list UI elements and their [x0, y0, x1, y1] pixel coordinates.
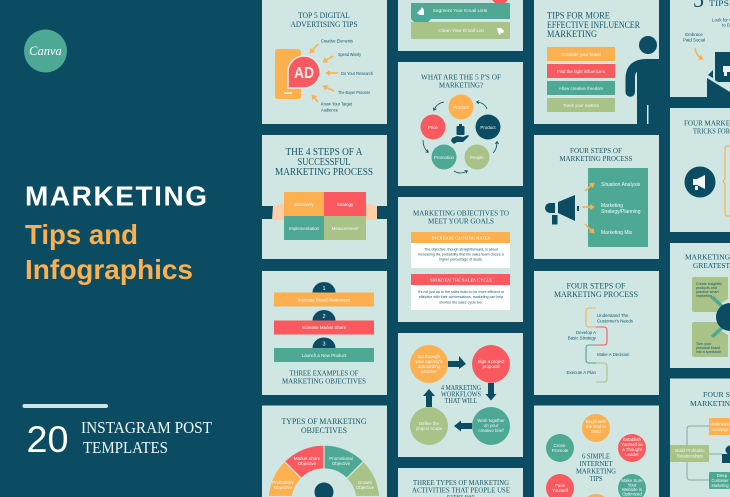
- heading: [690, 390, 730, 408]
- workflow circles: process: [421, 369, 437, 374]
- step 3: [274, 338, 374, 362]
- caption: Instagram post templates: TEMPLATES: [83, 438, 168, 457]
- card: sales cycle: It's not just up to the sales team to be more efficient or: [418, 290, 505, 294]
- panel: 4 marketing workflows: [398, 333, 523, 457]
- heading: FOUR S: [703, 390, 730, 399]
- heading: TIPS: [590, 474, 602, 483]
- orange brace: [723, 146, 730, 216]
- heading: ADVERTISING TIPS: [290, 19, 358, 29]
- heading: MARKETING PROCESS: [275, 167, 373, 178]
- heading: THAT WILL: [444, 397, 478, 405]
- subtitle: Tips and Infographics: Infographics: [25, 254, 193, 285]
- heading: [693, 0, 729, 12]
- tip circles: Yourself: [552, 488, 569, 493]
- ring labels: Market Share: [294, 456, 321, 461]
- green note cards: practice smart: [696, 290, 719, 294]
- step 3: 3: [322, 342, 326, 348]
- orange box: [709, 418, 730, 435]
- workflow circles: Define the: [419, 421, 440, 426]
- panel: types of marketing objectives: [262, 406, 387, 497]
- heading: EFFECTIVE INFLUENCER: [547, 20, 640, 30]
- tip labels: to D: [722, 22, 730, 28]
- heading: 4 MARKETING: [441, 384, 481, 392]
- ring labels: [272, 456, 375, 490]
- panel: four steps marketing partial: [670, 378, 730, 497]
- tip circles: Promote: [552, 448, 569, 453]
- heading: MARKETING PROCESS: [554, 290, 638, 299]
- bracket timeline: [586, 308, 607, 382]
- step 2: 2: [322, 314, 326, 320]
- tip circles: Pace: [555, 483, 566, 488]
- heading: [685, 252, 730, 270]
- heading: [290, 10, 358, 29]
- heading: WORKFLOWS: [441, 390, 481, 398]
- heading: MARKETING: [685, 252, 730, 262]
- tip circles: Establish: [623, 437, 641, 442]
- heading: THE 4 STEPS OF A: [286, 147, 363, 158]
- heading: [684, 118, 730, 136]
- icon: phone with AD pin: AD: [294, 65, 314, 82]
- workflow circles: onboarding: [418, 364, 441, 369]
- tips list: Audience: [321, 108, 339, 112]
- panel: marketing objectives to meet your goals: [398, 197, 523, 322]
- divider bar: [22, 404, 108, 408]
- workflow circles: your agency's: [416, 359, 443, 364]
- subtitle: Tips and Infographics: [25, 219, 193, 285]
- ring labels: Objective: [332, 461, 351, 466]
- arrow: [695, 48, 703, 59]
- panel: four steps with megaphone: [534, 135, 659, 259]
- tips list: The Buyer Process: [338, 90, 371, 95]
- heading: [421, 72, 501, 90]
- panel: three types of marketing activities: [398, 468, 523, 497]
- workflow circles: proposal: [483, 364, 499, 369]
- timeline labels: Basic Strategy: [568, 336, 597, 340]
- connector lines: [687, 426, 722, 480]
- tip circles: Optimized: [622, 492, 642, 496]
- tips list: [321, 38, 373, 112]
- teal ribbon: Segment Your Email Lists: [433, 8, 488, 14]
- teal list block: Marketing Mix: [601, 230, 633, 236]
- ring labels: Profitability: [272, 480, 295, 485]
- ring labels: Objective: [274, 485, 293, 490]
- card: sales cycle: [411, 274, 510, 310]
- step 1: 1: [322, 286, 326, 292]
- tips list: Creative Elements: [321, 38, 354, 44]
- tips bars: Consider your brand: [561, 52, 601, 57]
- timeline labels: Execute A Plan: [566, 370, 597, 375]
- tips bars: Allow creative freedom: [559, 86, 604, 91]
- green note cards: into a spectacle: [696, 350, 721, 354]
- card: sales cycle: effective with their conversations, marketing can help: [419, 295, 503, 299]
- tips bars: Track your metrics: [563, 103, 600, 108]
- step 1: [274, 282, 374, 306]
- heading: INTERNET: [580, 459, 613, 468]
- timeline labels: Understand The: [597, 313, 629, 318]
- tip circles: Begin with: [586, 419, 607, 424]
- workflow circles: Go through: [418, 354, 441, 359]
- ring hub: [314, 483, 334, 497]
- cycle circles: [420, 94, 500, 170]
- panel: three examples of marketing objectives: [262, 271, 387, 395]
- heading: [282, 368, 366, 386]
- heading: SUCCESSFUL: [298, 157, 350, 168]
- step 1: Increase Brand Awareness: [298, 298, 351, 302]
- hands holding board: [262, 202, 387, 220]
- heading: [441, 384, 481, 405]
- workflow circles: [410, 345, 510, 445]
- green centre box: [670, 445, 709, 462]
- step 2: [274, 310, 374, 334]
- four step grid: Strategy: [337, 202, 354, 207]
- workflow circles: creative brief: [478, 428, 504, 433]
- card: close rate: INCREASE CLOSING RATES: [432, 236, 491, 240]
- teal list block: Situation Analysis: [601, 182, 641, 188]
- card: close rate: higher percentage of deals.: [439, 258, 483, 262]
- green centre box: Build Profitable: [675, 448, 705, 453]
- icon: megaphone badge: [684, 166, 716, 198]
- tips bars: [547, 47, 615, 112]
- workflow arrows: [423, 356, 496, 432]
- left cover panel: [22, 30, 212, 460]
- caption: Instagram post templates: [81, 418, 212, 457]
- cycle arrows: [423, 102, 497, 173]
- icon: hand holding bag: [451, 124, 469, 144]
- timeline labels: Make A Decision: [597, 352, 630, 357]
- panel: 4 steps of a successful marketing process: [262, 135, 387, 259]
- panel: top 5 digital advertising tips: [262, 0, 387, 124]
- workflow circles: project scope: [416, 426, 443, 431]
- heading: TIPS FOR MORE: [547, 10, 610, 20]
- logo: Canva badge: [24, 30, 67, 72]
- tip labels: Embrace: [685, 32, 703, 37]
- icon: person: [722, 446, 730, 463]
- green note cards: marketing: [696, 294, 712, 298]
- green ribbon: Clean Your Email List: [438, 28, 484, 34]
- workflow circles: on your: [484, 423, 499, 428]
- heading: MARKETING OBJECTIVES: [282, 376, 366, 386]
- heading: TYPES OF MARKETING: [282, 417, 367, 426]
- arrows: [310, 44, 338, 102]
- four step grid: Implementation: [289, 226, 320, 231]
- logo: Canva badge: Canva: [29, 44, 62, 58]
- heading: THREE TYPES OF MARKETING: [413, 478, 510, 487]
- timeline labels: Develop A: [576, 330, 596, 335]
- heading: [576, 452, 617, 483]
- heading: FOUR STEPS OF: [566, 282, 626, 290]
- panel: influencer marketing tips: [534, 0, 670, 124]
- workflow circles: Sign a project: [478, 359, 505, 364]
- green note cards: [692, 277, 728, 357]
- four step grid: [284, 192, 366, 240]
- four step grid: Discovery: [294, 202, 314, 207]
- title: Marketing: MARKETING: [25, 180, 207, 212]
- tip labels: Paid Social: [683, 38, 705, 42]
- heading: MARKETING PROCESS: [560, 154, 632, 163]
- number: 20: 20: [26, 419, 68, 460]
- heading: [547, 10, 640, 39]
- panel: 6 simple internet marketing tips: [534, 406, 659, 497]
- red marker: [492, 0, 508, 8]
- cycle circles: Price: [428, 125, 439, 130]
- semi-circular ring chart: [268, 445, 380, 496]
- panel: email tips: [398, 0, 523, 51]
- green note cards: Create insightful: [696, 282, 722, 286]
- heading: [413, 208, 510, 226]
- caption: Instagram post templates: INSTAGRAM POST: [81, 418, 212, 437]
- timeline labels: Customer's Needs: [597, 318, 634, 324]
- card: sales cycle: SHORTEN THE SALES CYCLE: [430, 278, 492, 282]
- tip circles: [546, 414, 646, 497]
- ring labels: Objective: [356, 485, 375, 490]
- subtitle: Tips and Infographics: Tips and: [25, 219, 138, 250]
- green centre box: Relationships: [677, 454, 704, 458]
- teal box: [709, 472, 730, 489]
- teal list block: [588, 168, 648, 247]
- heading: [275, 147, 373, 178]
- panel: four steps timeline: [534, 271, 659, 395]
- teal list block: Strategy/Planning: [601, 209, 641, 215]
- heading: [554, 282, 638, 299]
- workflow circles: Work together: [477, 418, 505, 423]
- step 3: Launch a New Product: [302, 353, 347, 358]
- heading: [282, 417, 367, 435]
- green note cards: personal brand: [696, 346, 720, 350]
- card: sales cycle: shorten the sales cycle too.: [439, 300, 483, 304]
- tip circles: Mind: [591, 429, 601, 434]
- teal box: Deep: [717, 473, 728, 478]
- tip circles: Leader: [625, 452, 639, 457]
- tips list: Know Your Target: [321, 102, 353, 106]
- tips list: Do Your Research: [341, 71, 373, 76]
- heading: MARKETING OBJECTIVES TO: [413, 208, 510, 218]
- heading: GREATEST: [693, 261, 730, 270]
- ring labels: Objective: [298, 461, 317, 466]
- tip circles: Make Sure: [621, 478, 643, 483]
- teal arrows: [712, 297, 724, 337]
- icon: open envelope: [707, 52, 730, 97]
- four step grid: Measurement: [332, 226, 359, 231]
- green note cards: Turn your: [696, 342, 712, 346]
- tip labels: [683, 18, 730, 42]
- timeline labels: [566, 313, 634, 375]
- heading: [412, 478, 510, 497]
- tips bars: Find the right influencers: [557, 69, 606, 74]
- cycle circles: Product: [480, 125, 496, 130]
- heading: OBJECTIVES: [301, 426, 347, 435]
- panel: four marketing tricks partial: [670, 108, 730, 232]
- tips list: Spend Wisely: [338, 52, 362, 57]
- heading: MARKETING: [576, 466, 617, 476]
- teal box: Customer: [712, 478, 729, 483]
- cycle circles: Product: [453, 105, 469, 110]
- heading: THREE EXAMPLES OF: [290, 368, 358, 378]
- card: close rate: increasing the probability that the sales team closes a: [418, 252, 504, 256]
- heading: MEET YOUR GOALS: [428, 216, 494, 226]
- green note cards: products and: [696, 286, 717, 290]
- ring labels: Growth: [358, 480, 373, 485]
- heading: 6 SIMPLE: [582, 452, 610, 460]
- teal list block: Marketing: [601, 203, 623, 209]
- tip circles: Cross-: [554, 443, 567, 448]
- icon: megaphone: [545, 195, 579, 224]
- card: close rate: The objective, though straightforward, is about: [424, 248, 498, 252]
- step 2: Increase Market Share: [302, 325, 347, 330]
- tip circles: the End in: [586, 424, 606, 429]
- tip circles: Your: [628, 482, 637, 488]
- heading: ACTIVITIES THAT PEOPLE USE: [412, 486, 510, 494]
- tip circles: Website is: [622, 487, 643, 492]
- cycle circles: Promotion: [434, 155, 455, 160]
- heading: MARKETIN: [690, 399, 730, 408]
- panel: 5 tips partial: [670, 0, 730, 97]
- heading: WHAT ARE THE 5 P'S OF: [421, 72, 501, 82]
- panel: 5 P's of marketing: [398, 62, 523, 186]
- cycle circles: People: [470, 155, 484, 160]
- heading: [560, 146, 632, 163]
- card: close rate: [411, 232, 510, 268]
- tip circles: a Thought: [622, 447, 643, 452]
- ring labels: Promotional: [329, 456, 353, 461]
- hub circle: [716, 303, 730, 331]
- tip circles: Yourself as: [621, 442, 644, 447]
- heading: FOUR STEPS OF: [570, 146, 622, 155]
- heading: MARKETING: [547, 29, 597, 39]
- heading: TOP 5 DIGITAL: [298, 10, 350, 20]
- icon: person: [626, 36, 670, 124]
- panel: marketing greatest partial: [670, 243, 730, 368]
- heading: MARKETING?: [439, 80, 484, 90]
- arrows: [582, 183, 594, 233]
